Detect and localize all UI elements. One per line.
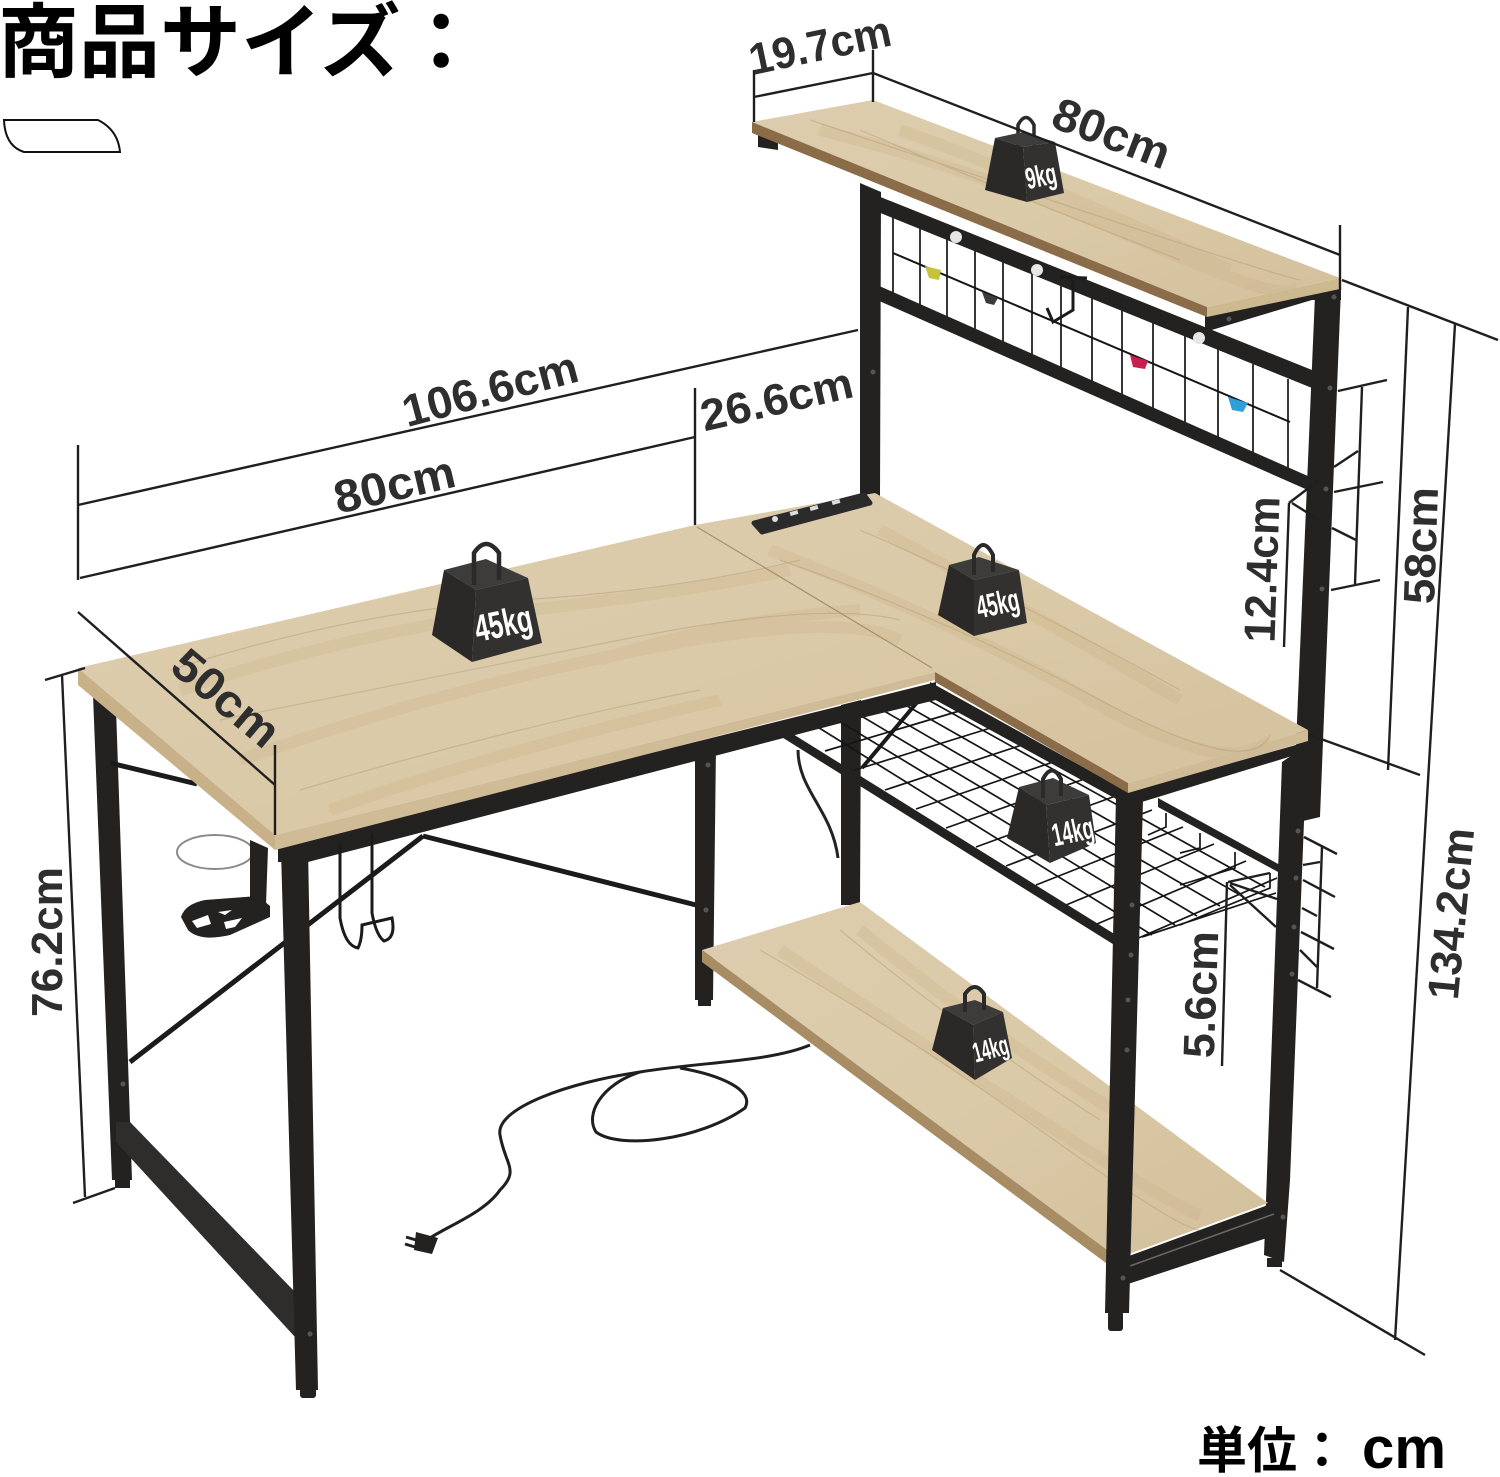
dimension: 58cm: 58cm — [1395, 486, 1448, 605]
basket front rail — [780, 726, 1116, 946]
dimension: 19.7cm — [744, 7, 896, 122]
unit note — [1197, 1416, 1446, 1477]
lower shelf rail — [1118, 1205, 1276, 1284]
dimension: 12.4cm — [1235, 380, 1387, 647]
top shelf — [752, 100, 1341, 332]
dimension: desk 80cm — [80, 388, 695, 578]
power strip — [754, 495, 870, 532]
basket side wires — [1142, 813, 1276, 937]
basket rear rail — [1158, 798, 1280, 873]
back left foot — [115, 1178, 130, 1188]
cup holder — [177, 835, 270, 938]
dimension: 106.6cm — [78, 330, 858, 580]
middle foot — [698, 998, 711, 1006]
weight: 14kg on lower shelf — [932, 987, 1012, 1080]
inner leg — [841, 700, 861, 905]
inner edge — [935, 672, 1128, 793]
hutch frame with pegboard — [860, 183, 1341, 821]
dimension: 50cm — [78, 612, 291, 835]
dimension: 50cm: 50cm — [162, 638, 291, 758]
dimension: 76.2cm — [23, 668, 115, 1203]
weight: 14kg on lower shelf: 14kg — [969, 1029, 1012, 1068]
rear right foot — [1267, 1258, 1282, 1267]
weight: 9kg: 9kg — [1022, 157, 1060, 196]
front left foot — [300, 1388, 316, 1398]
dimension: 12.4cm: 12.4cm — [1235, 496, 1290, 643]
plug — [414, 1232, 438, 1254]
left hutch upright — [860, 183, 881, 498]
dimension: 76.2cm: 76.2cm — [23, 867, 72, 1017]
dimension: 5.6cm — [1175, 837, 1337, 1066]
weight: 14kg on basket — [1007, 770, 1097, 863]
rear right leg — [1264, 745, 1307, 1262]
desk rail — [278, 682, 936, 862]
front legs — [120, 294, 1336, 1398]
dimension: desk 80cm: 80cm — [329, 445, 460, 524]
left edge — [78, 668, 275, 850]
headset hooks — [340, 833, 393, 948]
right hutch upright — [1296, 288, 1341, 821]
middle leg — [695, 745, 716, 1000]
wire basket — [780, 696, 1280, 946]
lower shelf — [702, 902, 1276, 1284]
dimension: 58cm — [1310, 307, 1448, 775]
title: 商品サイズ： — [0, 0, 482, 89]
right desk rail — [930, 682, 1305, 805]
basket cross wires — [825, 709, 1277, 943]
bottom side rail — [116, 1122, 295, 1337]
pegboard bottom bar — [868, 281, 1310, 491]
dimension: 5.6cm: 5.6cm — [1175, 930, 1228, 1059]
dimension: shelf 80cm: 80cm — [1045, 87, 1178, 179]
power cord — [405, 1045, 810, 1254]
weight: 45kg on return: 45kg — [973, 581, 1022, 625]
shelf foot — [758, 133, 778, 150]
desk seam — [697, 527, 932, 668]
front right foot — [1108, 1311, 1123, 1331]
front right leg — [1105, 796, 1143, 1313]
front left leg — [281, 848, 318, 1390]
pegboard clips — [925, 231, 1248, 412]
icon: desktop outline — [4, 120, 120, 152]
power cable behind desk — [798, 750, 838, 858]
pegboard wires — [893, 212, 1290, 475]
dimension: shelf 80cm — [873, 73, 1340, 290]
weight: 9kg — [985, 118, 1064, 202]
leg holes — [120, 294, 1336, 1336]
dimension: 134.2cm — [1280, 280, 1498, 1355]
dimension: 19.7cm: 19.7cm — [744, 7, 896, 85]
desktop — [78, 493, 1308, 862]
desk surface — [78, 493, 1308, 835]
back left leg — [93, 695, 132, 1180]
right edge — [1128, 730, 1308, 793]
cross brace — [130, 836, 700, 1062]
dimension: 134.2cm: 134.2cm — [1419, 826, 1484, 1002]
rear and back legs — [93, 695, 1307, 1337]
basket long wires — [816, 696, 1265, 935]
shelf bracket — [1205, 286, 1341, 332]
pegboard top bar — [868, 192, 1312, 388]
dimension: 26.6cm: 26.6cm — [696, 359, 858, 441]
weight: 45kg on desk — [432, 544, 542, 662]
dimension: 106.6cm: 106.6cm — [396, 341, 584, 437]
weight: 45kg on return — [938, 545, 1027, 636]
weight: 14kg on basket: 14kg — [1048, 809, 1097, 853]
weight: 45kg on desk: 45kg — [471, 598, 536, 651]
inner brace — [862, 700, 919, 768]
front edge — [275, 672, 935, 850]
side brace — [110, 763, 197, 784]
